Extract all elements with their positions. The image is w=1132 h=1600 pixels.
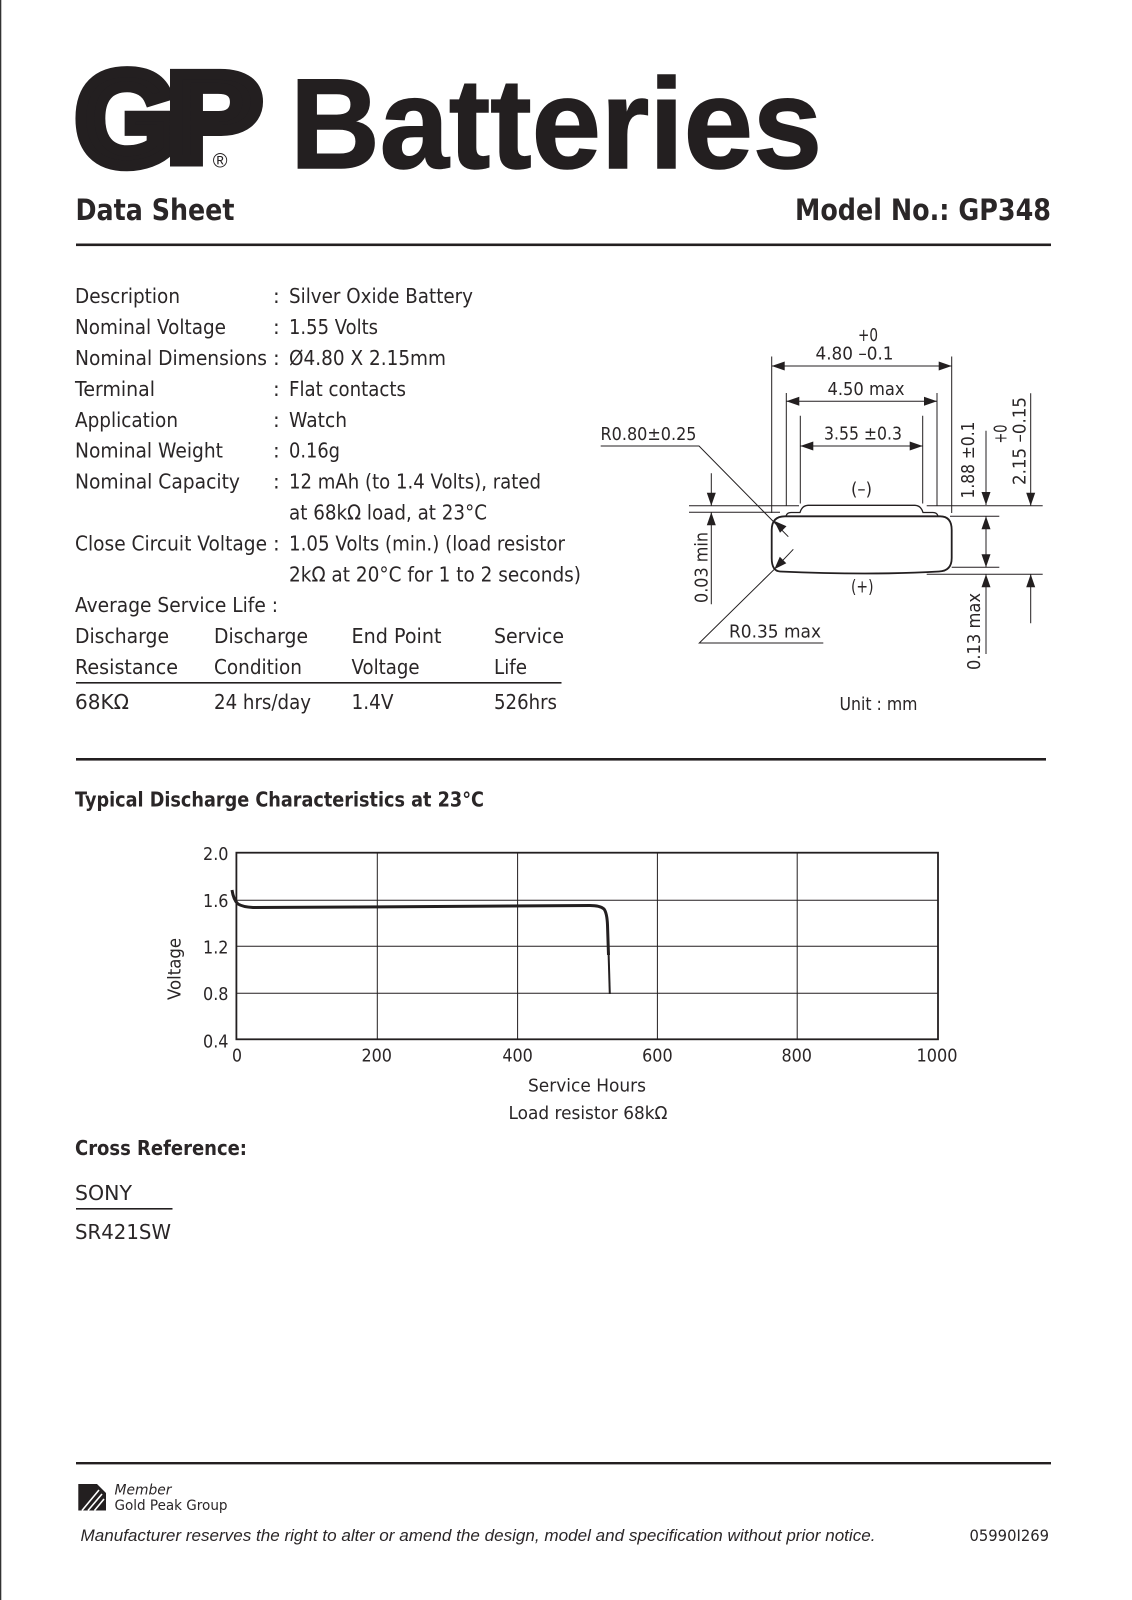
discharge line chart bbox=[164, 844, 958, 1124]
service life table: Resistance bbox=[75, 655, 178, 679]
service life table: End Point bbox=[352, 624, 442, 648]
specification list: 2kΩ at 20°C for 1 to 2 seconds) bbox=[289, 562, 581, 586]
dimension labels: 0.03 min bbox=[692, 532, 712, 603]
model: SR421SW: SR421SW bbox=[75, 1220, 171, 1244]
specification list: : bbox=[273, 438, 280, 462]
service life table: 1.4V bbox=[352, 690, 394, 714]
service life table bbox=[75, 624, 564, 714]
specification list bbox=[74, 284, 581, 617]
dimension labels: 4.50 max bbox=[828, 380, 904, 400]
extension lines bbox=[689, 356, 1043, 574]
x axis labels: 0 bbox=[232, 1046, 242, 1066]
specification list: 1.55 Volts bbox=[289, 315, 378, 339]
service life table: Discharge bbox=[75, 624, 169, 648]
icon: Gold Peak mark bbox=[78, 1484, 106, 1510]
dimension labels: 4.80 –0.1 bbox=[816, 344, 894, 364]
logo mark: GP: G bbox=[76, 46, 178, 194]
group name: Gold Peak Group bbox=[114, 1498, 228, 1514]
member label: Member bbox=[114, 1482, 173, 1498]
y axis labels bbox=[203, 844, 228, 1052]
dimension labels: R0.35 max bbox=[729, 622, 821, 642]
service life table: Service bbox=[494, 624, 564, 648]
y axis labels: 1.2 bbox=[203, 938, 228, 958]
dimension labels: 0.13 max bbox=[965, 593, 985, 670]
dimension labels: 1.88 ±0.1 bbox=[959, 422, 979, 498]
specification list: : bbox=[273, 532, 280, 556]
specification list: Application bbox=[75, 408, 178, 432]
specification list: 1.05 Volts (min.) (load resistor bbox=[289, 532, 566, 556]
logo mark: GP bbox=[76, 46, 262, 194]
specification list: Description bbox=[75, 284, 180, 308]
x axis labels bbox=[232, 1046, 958, 1066]
service life table: Voltage bbox=[352, 655, 420, 679]
battery outline bbox=[772, 516, 952, 574]
y axis labels: 0.4 bbox=[203, 1032, 228, 1052]
brand: SONY: SONY bbox=[75, 1181, 133, 1205]
wordmark: Batteries: Batteries bbox=[290, 53, 822, 196]
dimension lines bbox=[601, 366, 1031, 654]
specification list: : bbox=[273, 346, 280, 370]
specification list: 12 mAh (to 1.4 Volts), rated bbox=[289, 470, 541, 494]
x axis labels: 600 bbox=[642, 1046, 673, 1066]
specification list: Silver Oxide Battery bbox=[289, 284, 473, 308]
footer: Gold Peak Group member mark bbox=[78, 1482, 228, 1514]
specification list: Average Service Life : bbox=[75, 593, 278, 617]
document code: 05990I269 bbox=[970, 1526, 1049, 1545]
specification list: : bbox=[273, 315, 280, 339]
logo: GP Batteries bbox=[76, 46, 822, 196]
load note: Load resistor 68kΩ bbox=[508, 1103, 668, 1124]
specification list: at 68kΩ load, at 23°C bbox=[289, 500, 487, 524]
battery dimension diagram bbox=[600, 326, 1043, 715]
specification list: Nominal Capacity bbox=[75, 470, 240, 494]
dimension labels bbox=[600, 326, 1030, 715]
x axis title: Service Hours bbox=[528, 1076, 646, 1096]
heading: Data Sheet: Data Sheet bbox=[76, 193, 235, 227]
dimension labels: 2.15 –0.15 bbox=[1010, 397, 1030, 485]
cross reference bbox=[75, 1136, 247, 1244]
x axis labels: 400 bbox=[502, 1046, 533, 1066]
cross reference heading: Cross Reference: bbox=[75, 1136, 247, 1160]
service life table: 24 hrs/day bbox=[214, 690, 311, 714]
y axis labels: 0.8 bbox=[203, 984, 228, 1005]
specification list: Nominal Weight bbox=[75, 438, 223, 462]
dimension labels: R0.80±0.25 bbox=[600, 425, 696, 445]
logo mark: GP: ® bbox=[213, 150, 228, 172]
service life table: 526hrs bbox=[494, 690, 557, 714]
heading: Model number: Model No.: GP348 bbox=[795, 193, 1051, 227]
service life table: Condition bbox=[214, 655, 302, 679]
dimension labels: Unit : mm bbox=[840, 695, 918, 715]
specification list: Flat contacts bbox=[289, 377, 406, 401]
dimension labels: (+) bbox=[851, 578, 874, 598]
dimension labels: +0 bbox=[992, 424, 1012, 444]
specification list: 0.16g bbox=[289, 438, 340, 462]
dimension arrowheads bbox=[707, 362, 1035, 587]
dimension labels: +0 bbox=[858, 326, 878, 346]
plot frame bbox=[236, 853, 938, 1039]
y axis labels: 2.0 bbox=[203, 844, 228, 865]
dimension labels: 3.55 ±0.3 bbox=[824, 424, 902, 444]
logo mark: GP: P bbox=[167, 47, 262, 188]
specification list: Watch bbox=[289, 408, 347, 432]
service life table: Life bbox=[494, 655, 527, 679]
specification list: : bbox=[273, 408, 280, 432]
plot grid bbox=[236, 853, 938, 1039]
x axis labels: 200 bbox=[361, 1046, 392, 1066]
y axis labels: 1.6 bbox=[203, 891, 228, 912]
x axis labels: 1000 bbox=[916, 1046, 958, 1066]
specification list: : bbox=[273, 470, 280, 494]
y axis title: Voltage bbox=[164, 938, 186, 1000]
disclaimer: Manufacturer reserves the right to alter or amend the design, model and specification without prior notice. bbox=[80, 1526, 876, 1545]
specification list: Ø4.80 X 2.15mm bbox=[289, 346, 446, 370]
specification list: : bbox=[273, 284, 280, 308]
specification list: Nominal Voltage bbox=[75, 315, 226, 339]
dimension labels: (–) bbox=[851, 480, 872, 500]
specification list: Nominal Dimensions bbox=[75, 346, 267, 370]
chart heading: Typical Discharge Characteristics at 23°C bbox=[75, 788, 484, 812]
service life table: Discharge bbox=[214, 624, 308, 648]
battery terminal bbox=[786, 505, 938, 516]
x axis labels: 800 bbox=[781, 1046, 812, 1066]
specification list: : bbox=[273, 377, 280, 401]
service life table: 68KΩ bbox=[75, 690, 129, 714]
specification list: Close Circuit Voltage bbox=[75, 532, 267, 556]
discharge curve bbox=[232, 890, 608, 955]
specification list: Terminal bbox=[74, 377, 155, 401]
